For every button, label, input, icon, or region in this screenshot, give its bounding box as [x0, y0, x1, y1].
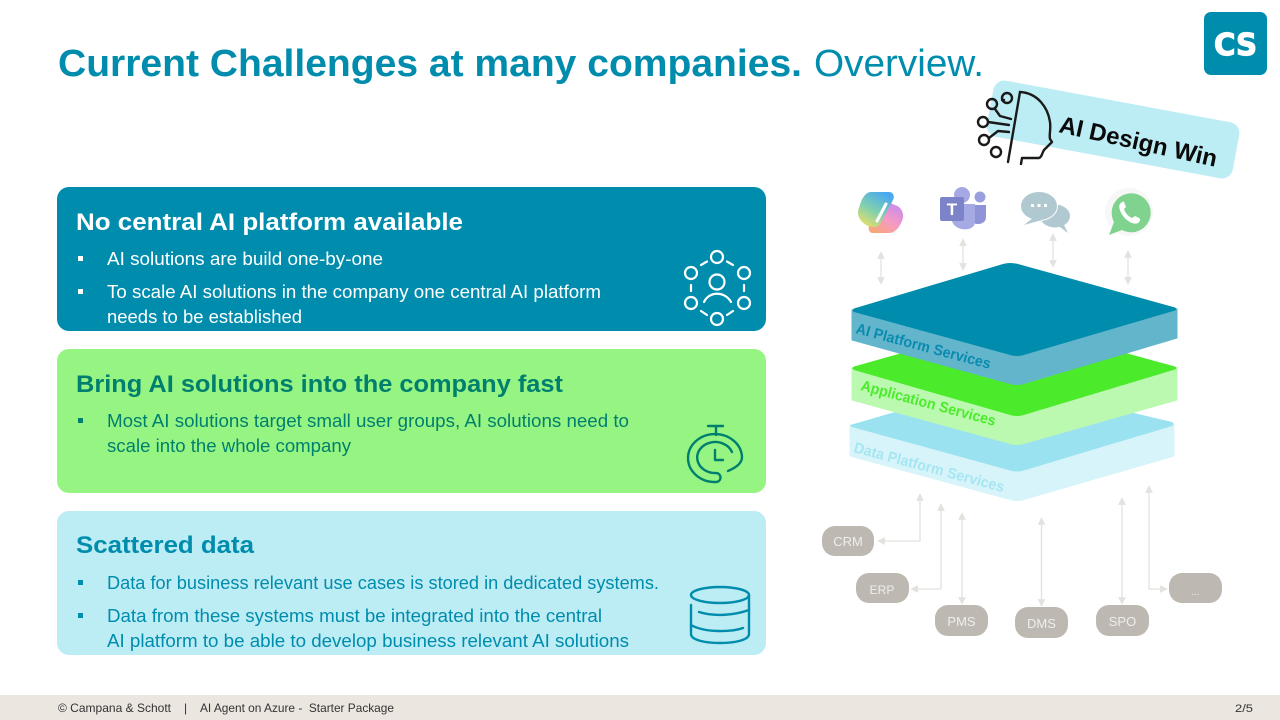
icon: Microsoft Teams [940, 187, 986, 229]
footer: | [184, 701, 187, 715]
footer: AI Agent on Azure - Starter Package [200, 701, 394, 715]
heading: bring AI solutions: Bring AI solutions into the company fast [76, 371, 563, 398]
bullet text block [78, 573, 659, 651]
footer: 2/5 [1235, 703, 1253, 715]
system: ERP: ERP [870, 583, 894, 597]
system: SPO: SPO [1109, 614, 1136, 629]
icon: AI head [978, 92, 1052, 164]
icon: WhatsApp [1105, 188, 1153, 236]
bullet text block: Most AI solutions target small user groups, AI solutions need to [107, 411, 629, 431]
bullet text block [78, 249, 601, 327]
heading: scattered data: Scattered data [76, 532, 255, 559]
footer [0, 695, 1280, 720]
system: SPO [1096, 605, 1149, 636]
bullet text block: scale into the whole company [107, 436, 351, 456]
system: DMS [1015, 607, 1068, 638]
icon: chat bubbles [1020, 192, 1070, 233]
label: Application Services [859, 377, 998, 430]
panel: no central AI platform [57, 187, 766, 331]
logo: CS: CS [1214, 28, 1257, 63]
bullet text block [78, 411, 629, 456]
arrows: upper connections [881, 237, 1128, 281]
bullet text block: Data for business relevant use cases is stored in dedicated systems. [107, 573, 659, 593]
icon: stopwatch [688, 426, 742, 482]
icon: Copilot [858, 192, 903, 233]
system: other: ... [1191, 587, 1200, 598]
icon: connected people [685, 251, 750, 325]
system: CRM [822, 526, 874, 556]
layer: data platform services [850, 396, 1174, 500]
system: ERP [856, 573, 909, 603]
bullet text block: AI platform to be able to develop business relevant AI solutions [107, 631, 629, 651]
footer: © Campana & Schott [58, 701, 172, 715]
layer: AI platform services [852, 263, 1177, 384]
bullet text block: To scale AI solutions in the company one central AI platform [107, 282, 601, 302]
label: AI Platform Services [854, 320, 993, 373]
title: Overview. [814, 43, 984, 85]
source systems [822, 526, 1222, 638]
system: CRM: CRM [833, 534, 863, 549]
layer: application services [852, 322, 1177, 444]
heading: no central AI platform: No central AI platform available [76, 209, 463, 236]
system: DMS: DMS [1027, 616, 1056, 631]
badge label: AI Design Win [1057, 111, 1220, 173]
icon: database [691, 587, 749, 643]
bullet text block: AI solutions are build one-by-one [107, 249, 383, 269]
bullet text block: needs to be established [107, 307, 302, 327]
panel: scattered data [57, 511, 766, 655]
label: Data Platform Services [852, 439, 1006, 496]
arrows: lower connections [881, 489, 1164, 603]
system: other [1169, 573, 1222, 603]
badge: AI Design Win [978, 79, 1241, 180]
bullet text block: Data from these systems must be integrated into the central [107, 606, 602, 626]
icon: Microsoft Teams: T [947, 200, 958, 219]
system: PMS: PMS [947, 614, 976, 629]
logo: CS [1204, 12, 1267, 75]
system: PMS [935, 605, 988, 636]
title: Current Challenges at many companies. [58, 43, 802, 85]
panel: bring AI solutions [57, 349, 766, 493]
